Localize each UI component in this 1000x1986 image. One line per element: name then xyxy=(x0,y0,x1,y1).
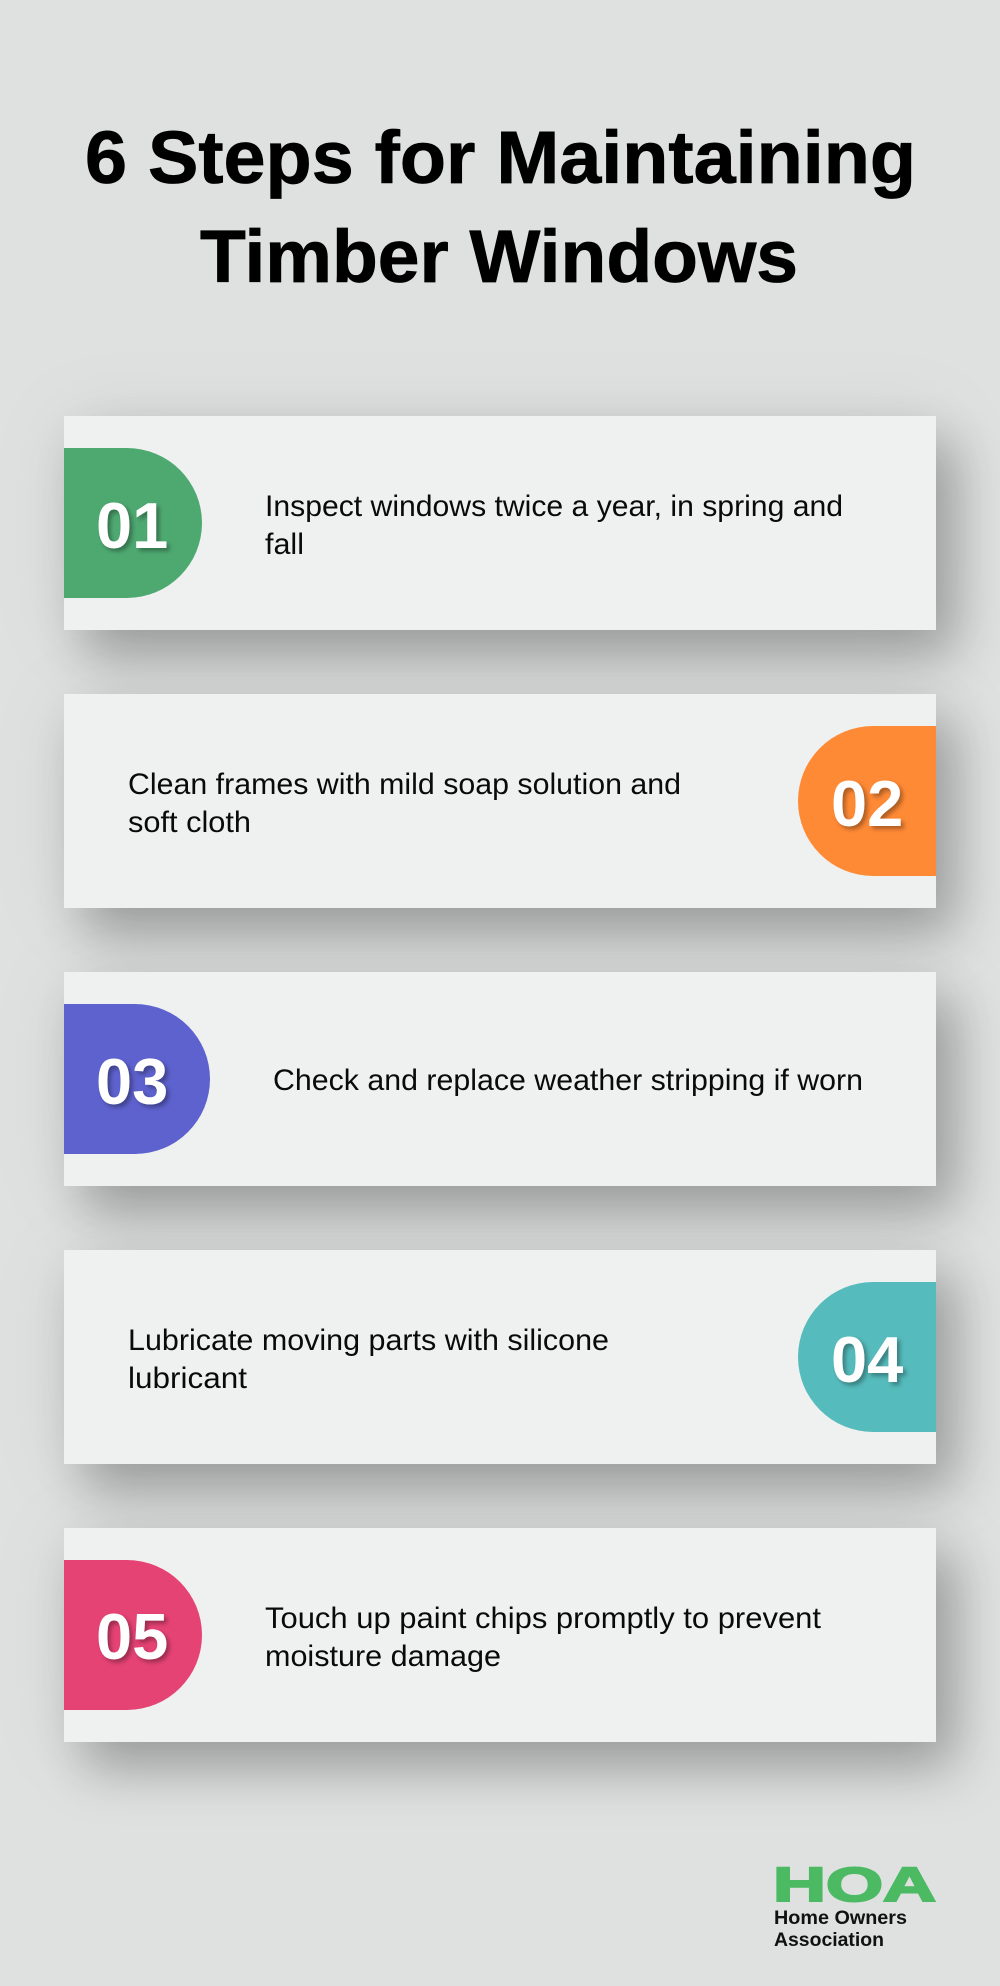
logo: HOA Home Owners Association: Home Owners xyxy=(774,1908,907,1929)
text: step 05 description: Touch up paint chips promptly to prevent xyxy=(265,1602,822,1635)
badge: 03 xyxy=(64,1004,210,1154)
text: step 05 description xyxy=(265,1602,822,1673)
text: step 04 description: lubricant xyxy=(128,1362,248,1395)
number: 02: 02 xyxy=(831,767,903,840)
text: step 02 description: soft cloth xyxy=(128,806,251,839)
badge: 02 xyxy=(798,726,936,876)
badge: 05 xyxy=(64,1560,202,1710)
text: step 02 description: Clean frames with mild soap solution and xyxy=(128,768,681,801)
number: 03: 03 xyxy=(96,1045,168,1118)
panel: step 03 xyxy=(64,972,936,1186)
title: 6 Steps for Maintaining xyxy=(85,116,916,199)
panel: step 04 xyxy=(64,1250,936,1464)
title: Timber Windows xyxy=(200,215,798,298)
logo: HOA Home Owners Association xyxy=(773,1859,936,1951)
title xyxy=(85,116,916,298)
panel: step 05 xyxy=(64,1528,936,1742)
text: step 01 description: Inspect windows twice a year, in spring and xyxy=(265,490,843,523)
text: step 02 description xyxy=(128,768,681,839)
number: 01: 01 xyxy=(96,489,168,562)
panel: step 02 xyxy=(64,694,936,908)
panel: step 01 xyxy=(64,416,936,630)
text: step 04 description xyxy=(128,1324,609,1395)
text: step 01 description: fall xyxy=(265,528,304,561)
logo: HOA Home Owners Association: HOA xyxy=(773,1859,936,1912)
text: step 04 description: Lubricate moving parts with silicone xyxy=(128,1324,609,1357)
number: 04: 04 xyxy=(831,1323,903,1396)
number: 05: 05 xyxy=(96,1600,168,1673)
badge: 01 xyxy=(64,448,202,598)
logo: HOA Home Owners Association: Association xyxy=(774,1930,884,1951)
text: step 05 description: moisture damage xyxy=(265,1640,501,1673)
text: step 01 description xyxy=(265,490,843,561)
badge: 04 xyxy=(798,1282,936,1432)
text: step 03 description: Check and replace weather stripping if worn xyxy=(273,1064,863,1097)
